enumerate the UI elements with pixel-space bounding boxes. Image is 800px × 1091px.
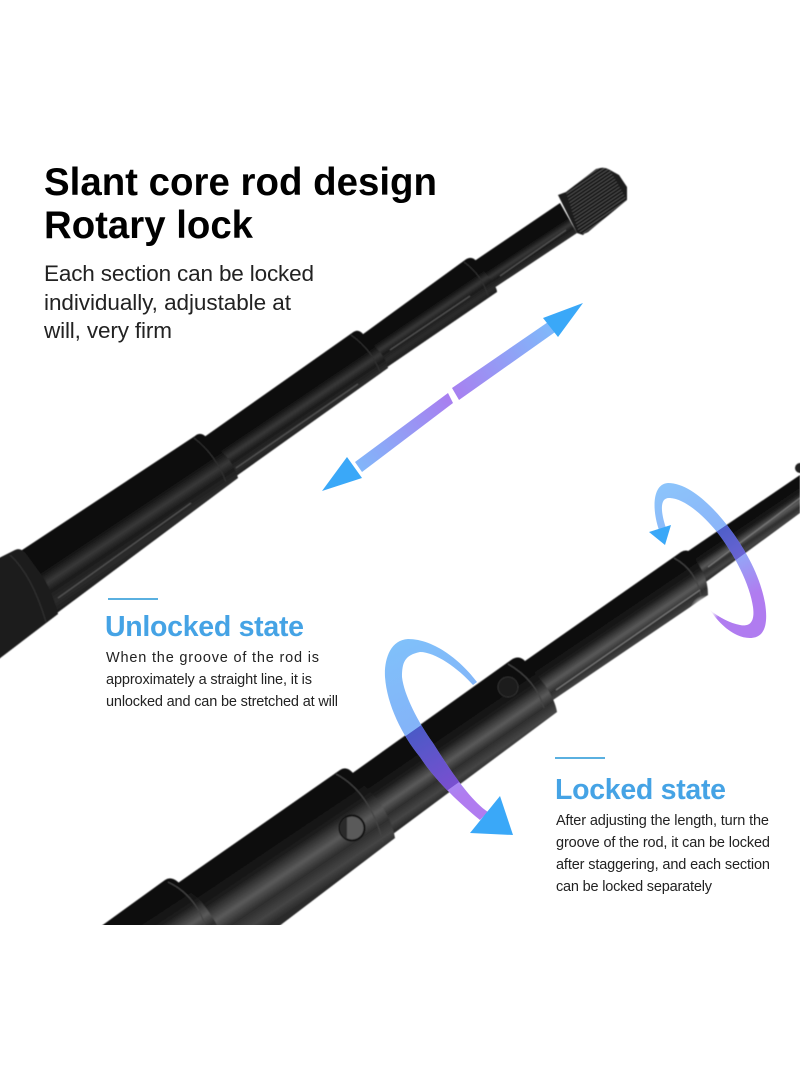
unlocked state description: approximately a straight line, it is bbox=[106, 672, 312, 688]
unlocked state description: When the groove of the rod is bbox=[106, 650, 319, 666]
infographic canvas bbox=[0, 166, 800, 925]
title: Slant core rod design bbox=[44, 161, 437, 204]
unlocked state description bbox=[106, 650, 338, 710]
panel: locked state bbox=[555, 757, 770, 895]
rod 2 third section bbox=[340, 658, 557, 840]
rotation arrow: upper ring bbox=[649, 483, 766, 638]
rod 2 far end knob bbox=[795, 463, 800, 473]
rod 1 second section bbox=[355, 258, 497, 372]
intro text: will, very firm bbox=[43, 318, 172, 343]
title: Rotary lock bbox=[44, 204, 253, 247]
rod 1 thick lower section bbox=[10, 434, 238, 622]
panel: unlocked state bbox=[105, 598, 338, 710]
unlocked state heading: Unlocked state bbox=[105, 611, 304, 643]
unlocked state description: unlocked and can be stretched at will bbox=[106, 694, 338, 710]
locked state description: can be locked separately bbox=[556, 879, 713, 895]
double arrow: telescoping direction bbox=[322, 303, 583, 491]
locked state description bbox=[556, 813, 770, 895]
title bbox=[44, 161, 437, 247]
locked state description: groove of the rod, it can be locked bbox=[556, 835, 770, 851]
intro text: individually, adjustable at bbox=[44, 290, 292, 315]
rod 2 lower pin bbox=[340, 816, 364, 840]
rotation arrow: lower ring bbox=[385, 639, 513, 835]
rod 2 fourth section bbox=[165, 768, 395, 927]
rod 2 end sleeve bbox=[100, 878, 218, 927]
rod 1 knurled knob bbox=[558, 168, 627, 235]
rod 2: rotary lock rod bbox=[100, 463, 800, 927]
locked state heading: Locked state bbox=[555, 774, 726, 806]
locked state description: after staggering, and each section bbox=[556, 857, 770, 873]
intro text: Each section can be locked bbox=[44, 261, 314, 286]
rod 1 thin top section bbox=[470, 203, 577, 292]
rod 2 second section bbox=[515, 551, 708, 700]
rod 2 thin section bbox=[688, 474, 800, 582]
rod 2 upper pin bbox=[498, 677, 518, 697]
intro text bbox=[43, 261, 314, 343]
rod 1: extended telescopic rod bbox=[0, 168, 627, 662]
rod 1 bottom sleeve bbox=[0, 549, 58, 662]
locked state description: After adjusting the length, turn the bbox=[556, 813, 769, 829]
rod 1 third section bbox=[200, 331, 388, 482]
